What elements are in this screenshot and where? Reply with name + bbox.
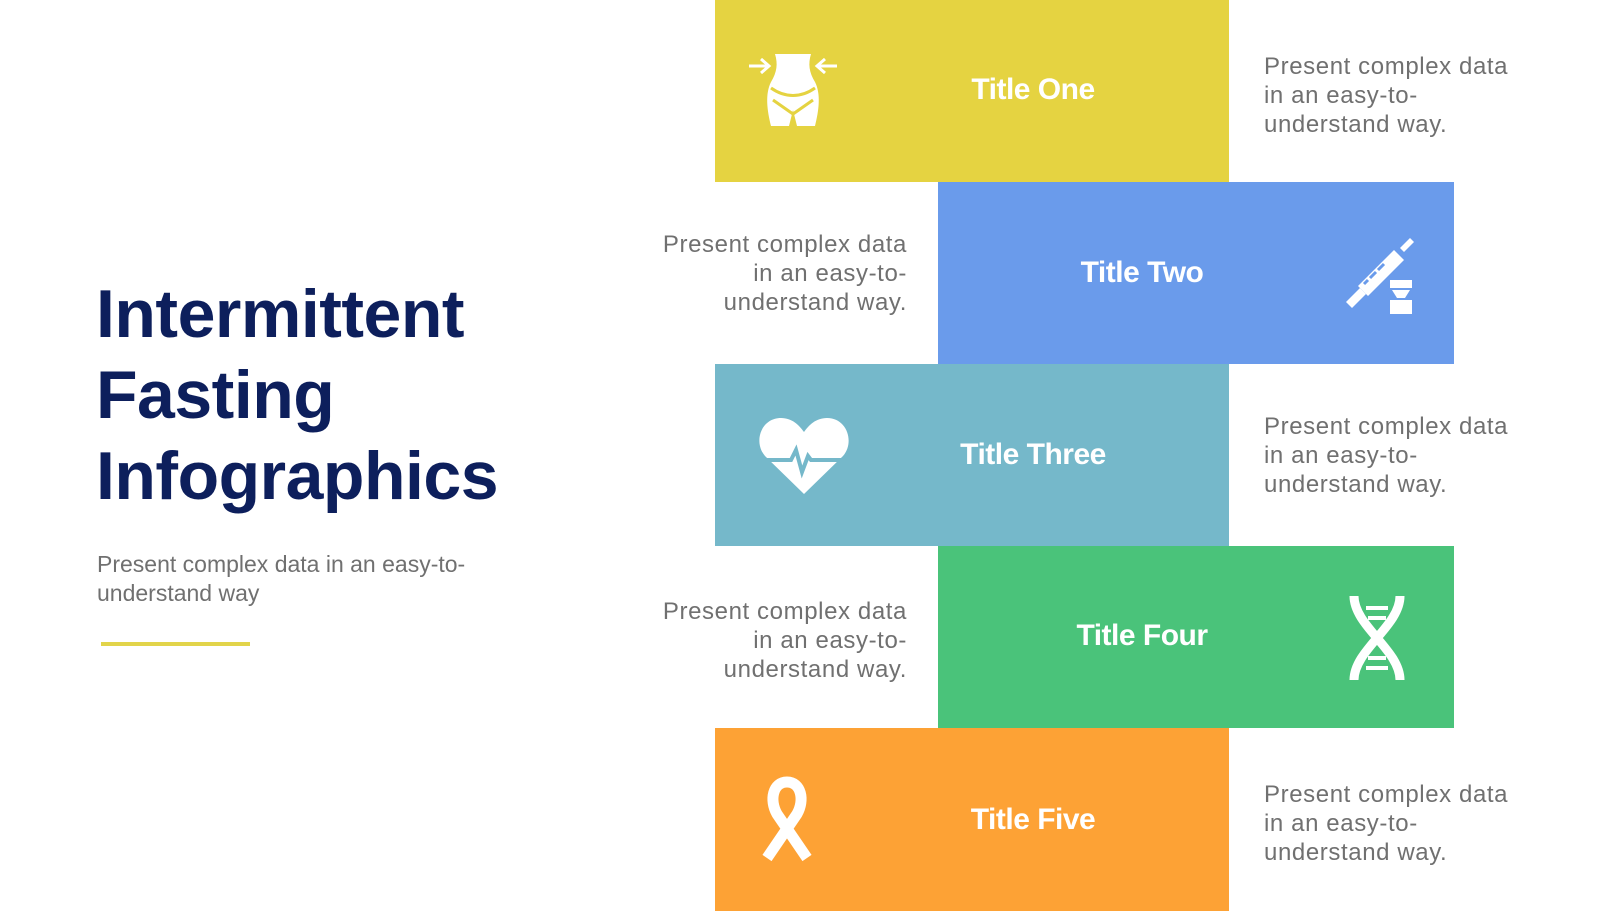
title: Infographics bbox=[96, 438, 498, 514]
text: four: understand way. bbox=[724, 656, 907, 683]
text: four: Present complex data bbox=[663, 598, 907, 625]
icon: dna bbox=[1350, 596, 1404, 680]
panel: five bbox=[715, 728, 1229, 911]
text: two: Present complex data bbox=[663, 231, 907, 258]
panel: three bbox=[715, 364, 1229, 546]
text: three bbox=[1264, 413, 1508, 498]
heading: Title Three bbox=[960, 438, 1106, 471]
heading: Title Two bbox=[1081, 256, 1203, 289]
subtitle: Present complex data in an easy-to- bbox=[97, 551, 465, 577]
heading: Title Five bbox=[971, 803, 1095, 836]
heading: Title Four bbox=[1076, 619, 1208, 652]
text: two bbox=[663, 231, 907, 316]
accent line bbox=[101, 642, 250, 646]
text: four: in an easy-to- bbox=[753, 627, 907, 654]
text: five: in an easy-to- bbox=[1264, 810, 1418, 837]
panel: one bbox=[715, 0, 1229, 182]
text: three: Present complex data bbox=[1264, 413, 1508, 440]
text: two: understand way. bbox=[724, 289, 907, 316]
text: five: Present complex data bbox=[1264, 781, 1508, 808]
heading: Title One bbox=[971, 73, 1095, 106]
text: three: in an easy-to- bbox=[1264, 442, 1418, 469]
text: three: understand way. bbox=[1264, 471, 1447, 498]
icon: ribbon bbox=[762, 776, 812, 862]
title: Intermittent bbox=[96, 276, 464, 352]
icon: syringe bbox=[1346, 238, 1414, 314]
text: one bbox=[1264, 53, 1508, 138]
text: two: in an easy-to- bbox=[753, 260, 907, 287]
subtitle: understand way bbox=[97, 580, 259, 606]
title: Fasting bbox=[96, 357, 334, 433]
text: one: in an easy-to- bbox=[1264, 82, 1418, 109]
icon: heart bbox=[759, 418, 849, 494]
panel: four bbox=[938, 546, 1454, 728]
text: one: understand way. bbox=[1264, 111, 1447, 138]
text: one: Present complex data bbox=[1264, 53, 1508, 80]
title bbox=[96, 276, 498, 514]
text: five: understand way. bbox=[1264, 839, 1447, 866]
text: four bbox=[663, 598, 907, 683]
icon: waist bbox=[749, 54, 837, 126]
panel: two bbox=[938, 182, 1454, 364]
subtitle bbox=[97, 551, 465, 606]
text: five bbox=[1264, 781, 1508, 866]
